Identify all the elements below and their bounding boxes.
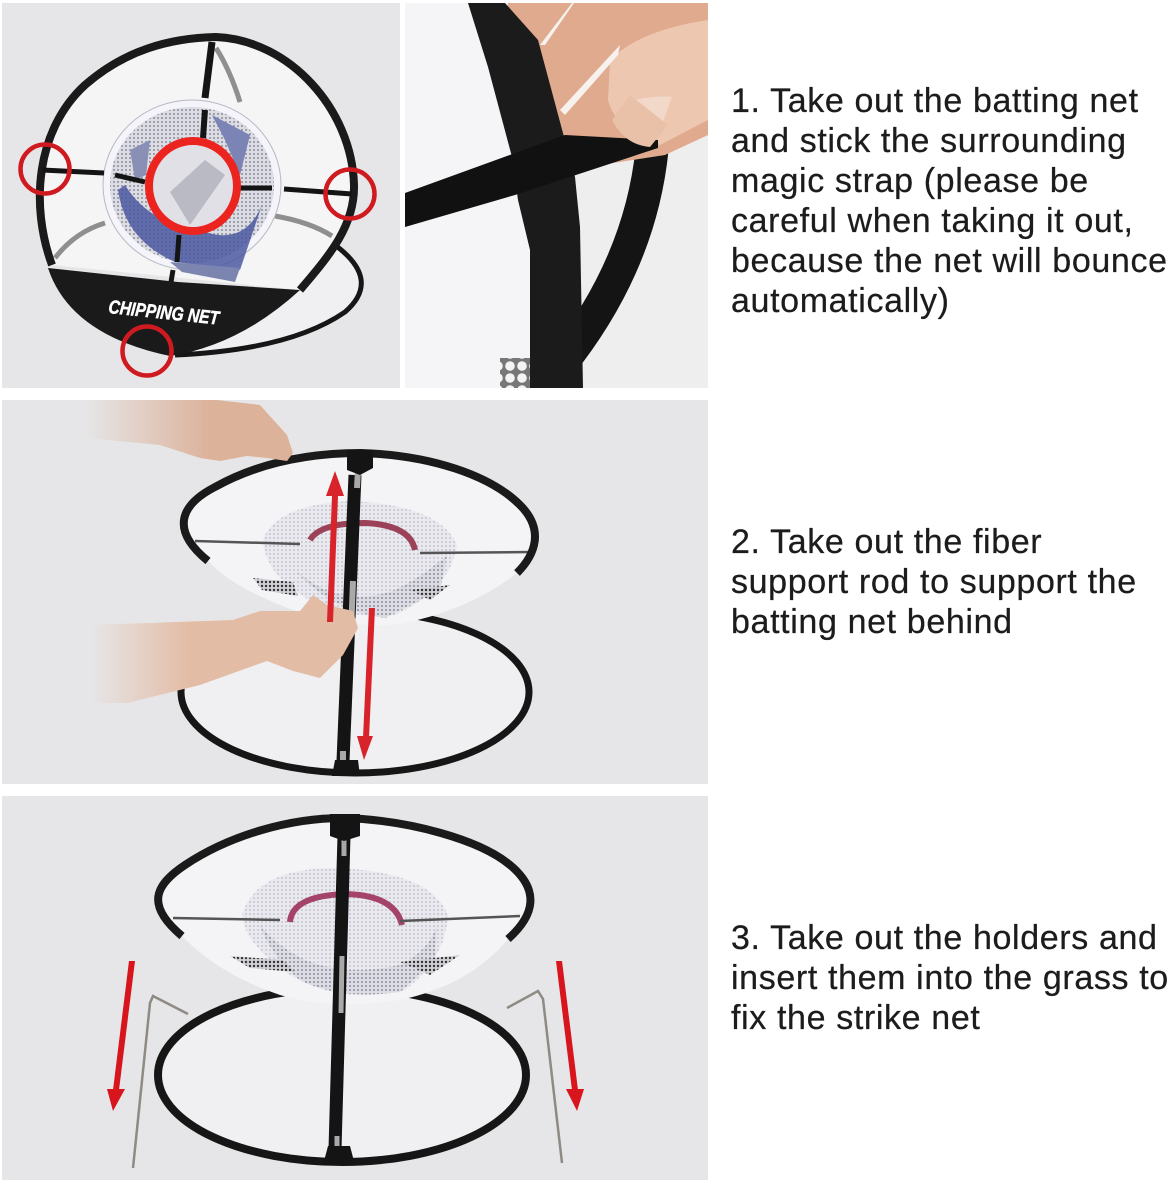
horizontal strap: [405, 135, 658, 227]
net hoop: [184, 453, 535, 573]
text: step 2 instructions: support rod to support the: [731, 563, 1137, 601]
red centre ring: [149, 141, 237, 231]
text: step 1 instructions: and stick the surrounding: [731, 122, 1127, 160]
text: step 2 instructions: 2. Take out the fiber: [731, 523, 1042, 561]
net hoop: [40, 37, 354, 290]
text: step 3 instructions: 3. Take out the holders and: [731, 919, 1158, 957]
black bottom pouch: [48, 268, 300, 356]
net bowl: [184, 453, 535, 625]
inner basket: [253, 501, 457, 618]
text: step 1 instructions: 1. Take out the batting net: [731, 82, 1139, 120]
text: step 2 instructions: batting net behind: [731, 603, 1013, 641]
net hoop outline: [40, 37, 354, 290]
text: step 1 instructions: automatically): [731, 282, 950, 320]
red arrow up: [326, 471, 344, 622]
tension wire: [195, 541, 530, 553]
red arrow down: [357, 608, 375, 760]
hoop arc: [560, 150, 652, 365]
text: step 1 instructions: magic strap (please be: [731, 162, 1089, 200]
text: step 1 instructions: because the net will bounce: [731, 242, 1168, 280]
support rod: [323, 814, 360, 1165]
red arrow right: [556, 961, 584, 1111]
rear mesh bands: [55, 48, 332, 258]
white net: [405, 3, 540, 388]
panel: step 2 fiber support rod photo: [2, 400, 708, 784]
net hoop: [158, 818, 530, 939]
ground hoop outline: [175, 245, 361, 355]
panel: step 1 hand and strap close-up photo: [405, 3, 708, 388]
right holder stake: [507, 991, 562, 1163]
ground hoop: [158, 988, 526, 1162]
text: step 1 instructions: careful when taking it out,: [731, 202, 1134, 240]
support rod: [332, 450, 373, 776]
red marker circles: [20, 144, 374, 376]
panel: step 1 chipping net front photo: [2, 3, 400, 388]
vertical strap: [468, 3, 583, 388]
text: step 3 instructions: insert them into the grass to: [731, 959, 1169, 997]
hex net edge: [500, 358, 532, 388]
ground hoop: [175, 245, 361, 355]
net bowl: [158, 818, 530, 1004]
lower hand: [90, 595, 358, 703]
red arrow left: [107, 961, 135, 1111]
thumb tip: [612, 95, 668, 147]
tension wire: [173, 916, 520, 921]
black cross straps: [42, 42, 352, 282]
inner basket: [103, 100, 281, 282]
left holder stake: [133, 996, 188, 1168]
hand: [507, 3, 708, 170]
ground hoop: [181, 611, 529, 773]
inner basket: [230, 868, 460, 995]
text: step 3 instructions: fix the strike net: [731, 999, 980, 1037]
upper hand: [85, 400, 293, 461]
pouch label: CHIPPING NET: [107, 297, 221, 330]
panel: step 3 holders photo: [2, 796, 708, 1180]
